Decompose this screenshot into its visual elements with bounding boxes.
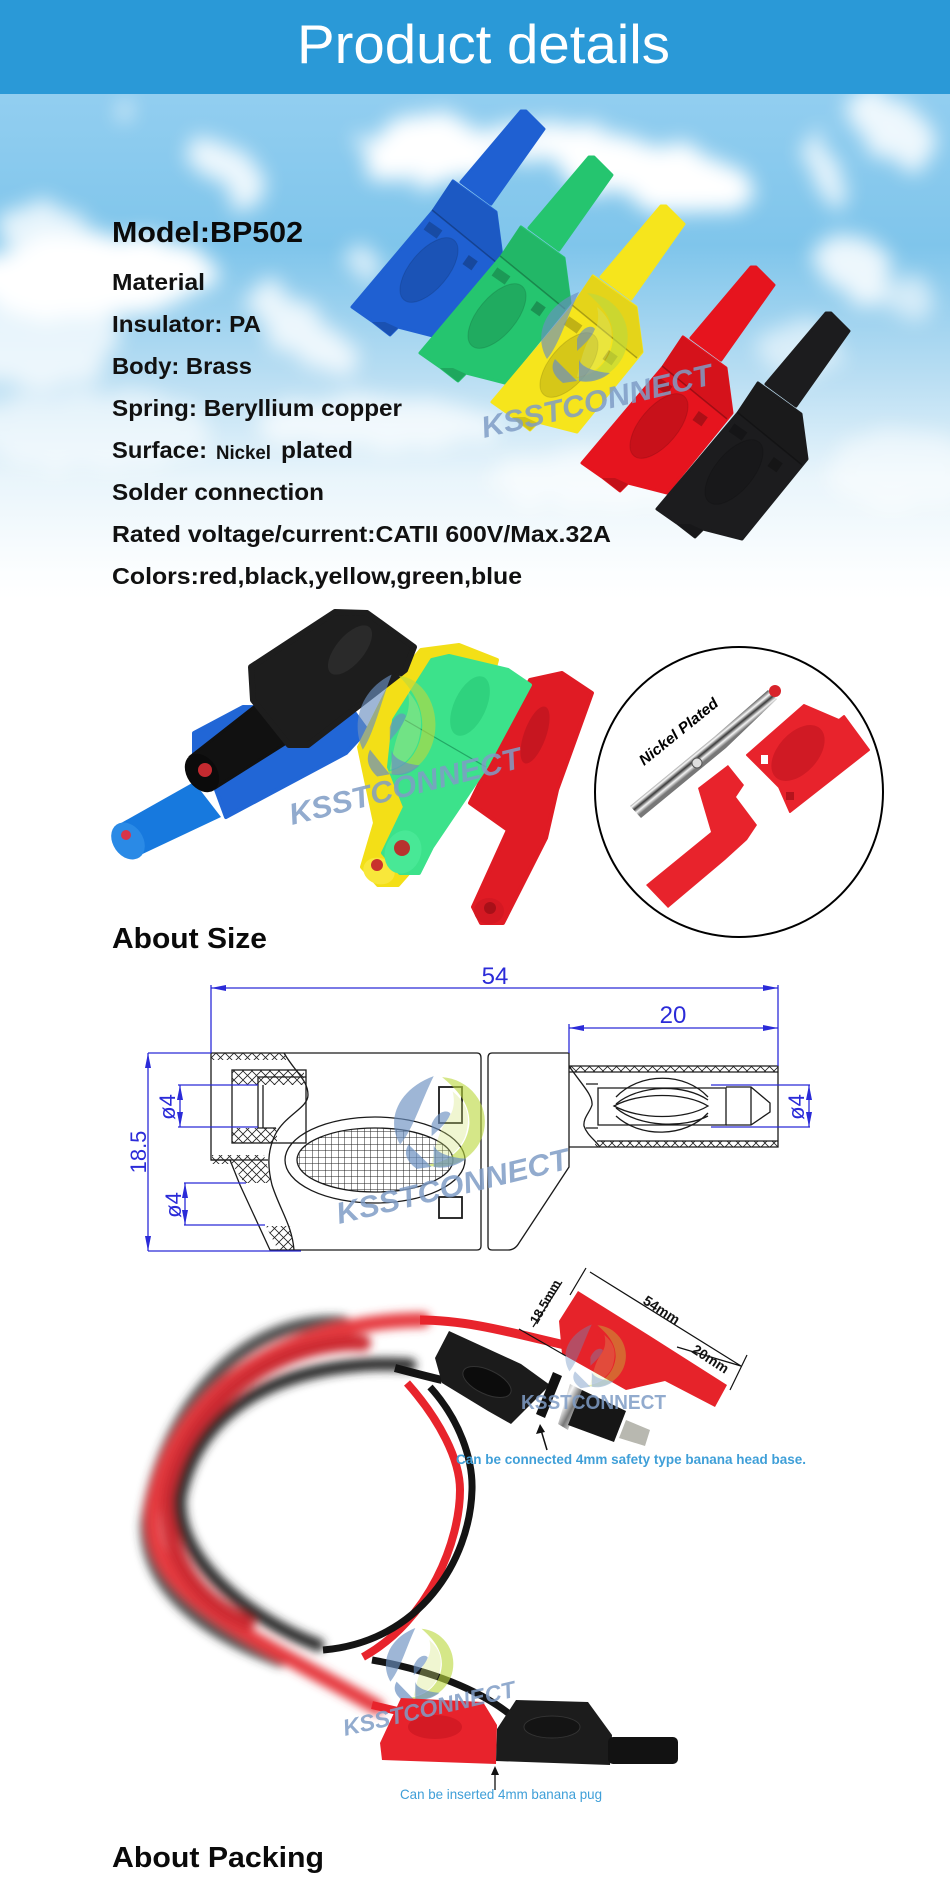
watermark logo upper xyxy=(565,1324,626,1388)
surface xyxy=(112,437,353,464)
watermark text: KSSTCONNECT xyxy=(286,742,527,832)
surface: Surface: xyxy=(112,437,207,463)
heading: about size: About Size xyxy=(112,923,267,955)
dimension 20: 20 xyxy=(660,1002,686,1029)
arrow to socket xyxy=(536,1424,547,1450)
dimension 18.5mm: 18.5mm xyxy=(527,1277,564,1326)
green plug xyxy=(379,656,530,879)
size drawing xyxy=(126,963,812,1251)
nickel plated label: Nickel Plated xyxy=(636,694,723,769)
solder: Solder connection xyxy=(112,479,324,505)
title: Product details xyxy=(297,13,670,75)
watermark logo xyxy=(358,675,435,777)
red plug upper xyxy=(559,1291,727,1407)
rating: Rated voltage/current:CATII 600V/Max.32A xyxy=(112,521,611,547)
nickel plated pin xyxy=(630,685,781,818)
dimension dia 4 lower: ø4 xyxy=(161,1192,186,1218)
watermark text: KSSTCONNECT xyxy=(333,1143,575,1231)
blue plug xyxy=(104,707,367,866)
dimension dia 4 upper: ø4 xyxy=(155,1094,180,1120)
header bar xyxy=(0,0,950,94)
watermark logo xyxy=(394,1076,485,1169)
arrow to plug xyxy=(491,1766,499,1790)
material: Material xyxy=(112,269,205,295)
dimension lines on upper plug xyxy=(519,1268,747,1390)
dimension 20mm: 20mm xyxy=(689,1341,732,1377)
watermark text upper: KSSTCONNECT xyxy=(521,1392,666,1414)
dimension arrows xyxy=(145,985,812,1251)
black plug xyxy=(178,612,414,799)
dimension dia 4 right: ø4 xyxy=(784,1094,809,1120)
sharp wires xyxy=(323,1320,565,1716)
black plug lower xyxy=(496,1700,678,1765)
dimension 54mm: 54mm xyxy=(640,1292,683,1328)
model heading: Model:BP502 xyxy=(112,217,303,249)
body outline xyxy=(211,1053,569,1250)
red plug lower xyxy=(380,1698,497,1764)
dimension 18.5: 18.5 xyxy=(126,1131,151,1173)
red connector xyxy=(582,267,774,493)
photo: connector bundle xyxy=(104,612,592,924)
pin outline xyxy=(569,1066,778,1147)
wire photo xyxy=(147,1268,806,1802)
hatching xyxy=(211,1053,778,1250)
red plug xyxy=(470,673,592,924)
red upper shell xyxy=(747,705,869,812)
spec text block xyxy=(112,217,611,589)
yellow connector xyxy=(492,206,684,432)
callout circle: nickel plated parts xyxy=(595,647,883,937)
insulator: Insulator: PA xyxy=(112,311,261,337)
heading: about packing: About Packing xyxy=(112,1842,324,1874)
dimension lines xyxy=(148,985,810,1251)
black plug upper xyxy=(435,1331,550,1424)
watermark logo lower xyxy=(386,1628,453,1701)
watermark text lower: KSSTCONNECT xyxy=(340,1676,520,1741)
black connector xyxy=(657,313,849,539)
banana socket xyxy=(536,1372,650,1446)
blue connector xyxy=(352,111,544,337)
surface: plated xyxy=(281,437,353,463)
surface: Nickel xyxy=(216,443,271,464)
watermark text: KSSTCONNECT xyxy=(478,358,718,445)
colors: Colors:red,black,yellow,green,blue xyxy=(112,563,522,589)
connectors row: five colours xyxy=(352,111,849,539)
green connector xyxy=(420,157,612,383)
spring: Spring: Beryllium copper xyxy=(112,395,402,421)
body: Body: Brass xyxy=(112,353,252,379)
dimension 54: 54 xyxy=(482,963,508,990)
yellow plug xyxy=(359,645,497,889)
blurred wire loop xyxy=(147,1320,423,1707)
sky panel with clouds xyxy=(0,78,950,604)
watermark logo xyxy=(541,292,628,383)
red lower shell xyxy=(646,765,757,908)
caption: plug: Can be inserted 4mm banana pug xyxy=(400,1786,602,1802)
caption: socket: Can be connected 4mm safety type banana head base. xyxy=(456,1452,806,1467)
